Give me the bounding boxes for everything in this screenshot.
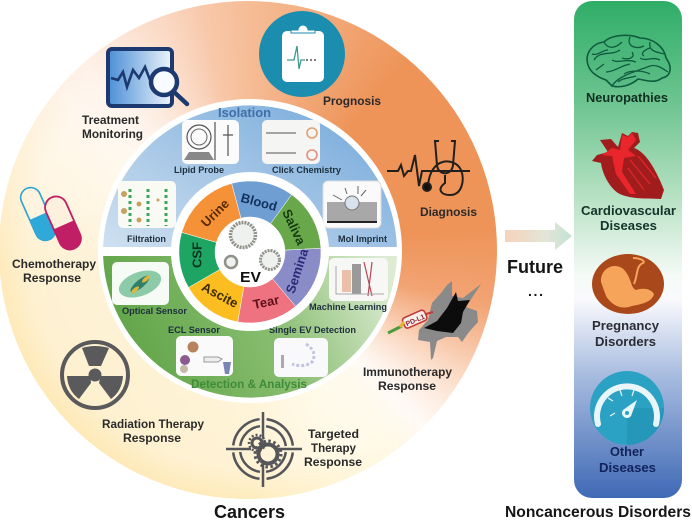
label: blood: Blood [239,190,279,214]
label: chemotherapy response: Response [23,271,81,285]
label: mol imprint: Mol Imprint [338,234,388,245]
label: csf: CSF [190,242,204,268]
label: diagnosis: Diagnosis [420,205,477,219]
label: radiation therapy response: Response [123,431,181,445]
label: filtration: Filtration [127,234,166,245]
label: ev: EV [240,269,261,286]
text: ellipsis: ... [528,283,543,299]
label: other diseases: Diseases [599,460,656,475]
label: targeted therapy response [304,427,362,469]
label: urine: Urine [198,196,232,230]
arrow: toward future [505,222,572,250]
segment: semina [272,248,321,306]
label: pregnancy disorders: Disorders [595,334,656,349]
label: single ev detection: Single EV Detection [269,325,356,336]
thumbnail: click chemistry [262,120,320,164]
icon: targeted therapy gears [226,412,302,487]
icon: chemotherapy capsules [17,184,84,253]
icon: fetus [592,254,664,314]
label: cardiovascular diseases: Cardiovascular [581,203,676,218]
icon: prognosis clipboard [259,11,345,97]
icon: extracellular vesicles [225,222,280,270]
heading: detection and analysis: Detection & Analysis [191,377,307,391]
label: pregnancy disorders: Pregnancy [592,318,660,333]
thumbnail: ecl sensor [176,336,233,376]
segment: urine [182,183,241,242]
label: radiation therapy response: Radiation Therapy [102,417,204,431]
thumbnail: optical sensor [112,262,169,305]
label: targeted therapy response: Targeted [308,427,359,441]
label: ecl sensor: ECL Sensor [168,325,220,336]
label: immunotherapy response: Immunotherapy [363,365,452,379]
label: targeted therapy response: Therapy [311,441,356,455]
label: ascite: Ascite [199,279,241,311]
segment: ascite [188,270,244,322]
label: tear: Tear [251,292,281,312]
heading: isolation: Isolation [218,105,271,120]
icon: immunotherapy cell and antibody: PD-L1 [405,314,426,328]
panel: detection band [103,256,397,398]
label: treatment monitoring: Treatment [82,113,139,127]
segment: csf [179,232,220,288]
label: treatment monitoring: Monitoring [82,127,143,141]
label: immunotherapy response [363,365,452,393]
icon: radiation symbol [62,342,128,408]
segment: blood [232,181,292,224]
label: machine learning: Machine Learning [309,302,387,313]
heading: noncancerous disorders: Noncancerous Disorders [505,504,691,521]
label: targeted therapy response: Response [304,455,362,469]
panel: noncancerous disorders [574,1,682,498]
label: prognosis: Prognosis [323,94,381,108]
chart: body-fluid source wheel [171,173,329,331]
label: radiation therapy response [102,417,204,445]
label: other diseases: Other [610,444,644,459]
label: semina: Semina [283,246,312,295]
thumbnail: filtration [118,181,176,228]
label: chemotherapy response: Chemotherapy [12,257,96,271]
icon: gauge [590,371,664,445]
icon: treatment monitoring [108,49,187,106]
panel: isolation band [103,105,397,247]
label: click chemistry: Click Chemistry [272,165,342,176]
icon: immunotherapy cell and antibody [388,281,481,360]
label: neuropathies: Neuropathies [586,90,668,105]
panel: cancers gradient ring [0,1,497,499]
label: cardiovascular diseases [581,203,676,233]
thumbnail: molecular imprint [323,181,381,228]
label: saliva: Saliva [279,207,309,248]
label: treatment monitoring [82,113,143,141]
text: future: Future [507,257,563,277]
label: other diseases [599,444,656,475]
panel: isolation and detection disc [98,99,402,403]
label: lipid probe: Lipid Probe [174,165,224,176]
label: immunotherapy response: Response [378,379,436,393]
icon: diagnosis stethoscope [387,141,470,195]
label: chemotherapy response [12,257,96,285]
label: optical sensor: Optical Sensor [122,306,187,317]
segment: saliva [271,195,321,250]
thumbnail: lipid probe [182,120,239,164]
thumbnail: machine learning [329,258,388,301]
thumbnail: single ev detection [274,338,328,377]
label: cardiovascular diseases: Diseases [600,218,657,233]
segment: tear [238,279,296,323]
icon: brain [587,35,670,87]
icon: anatomical heart [592,132,664,199]
label: pregnancy disorders [592,318,660,349]
